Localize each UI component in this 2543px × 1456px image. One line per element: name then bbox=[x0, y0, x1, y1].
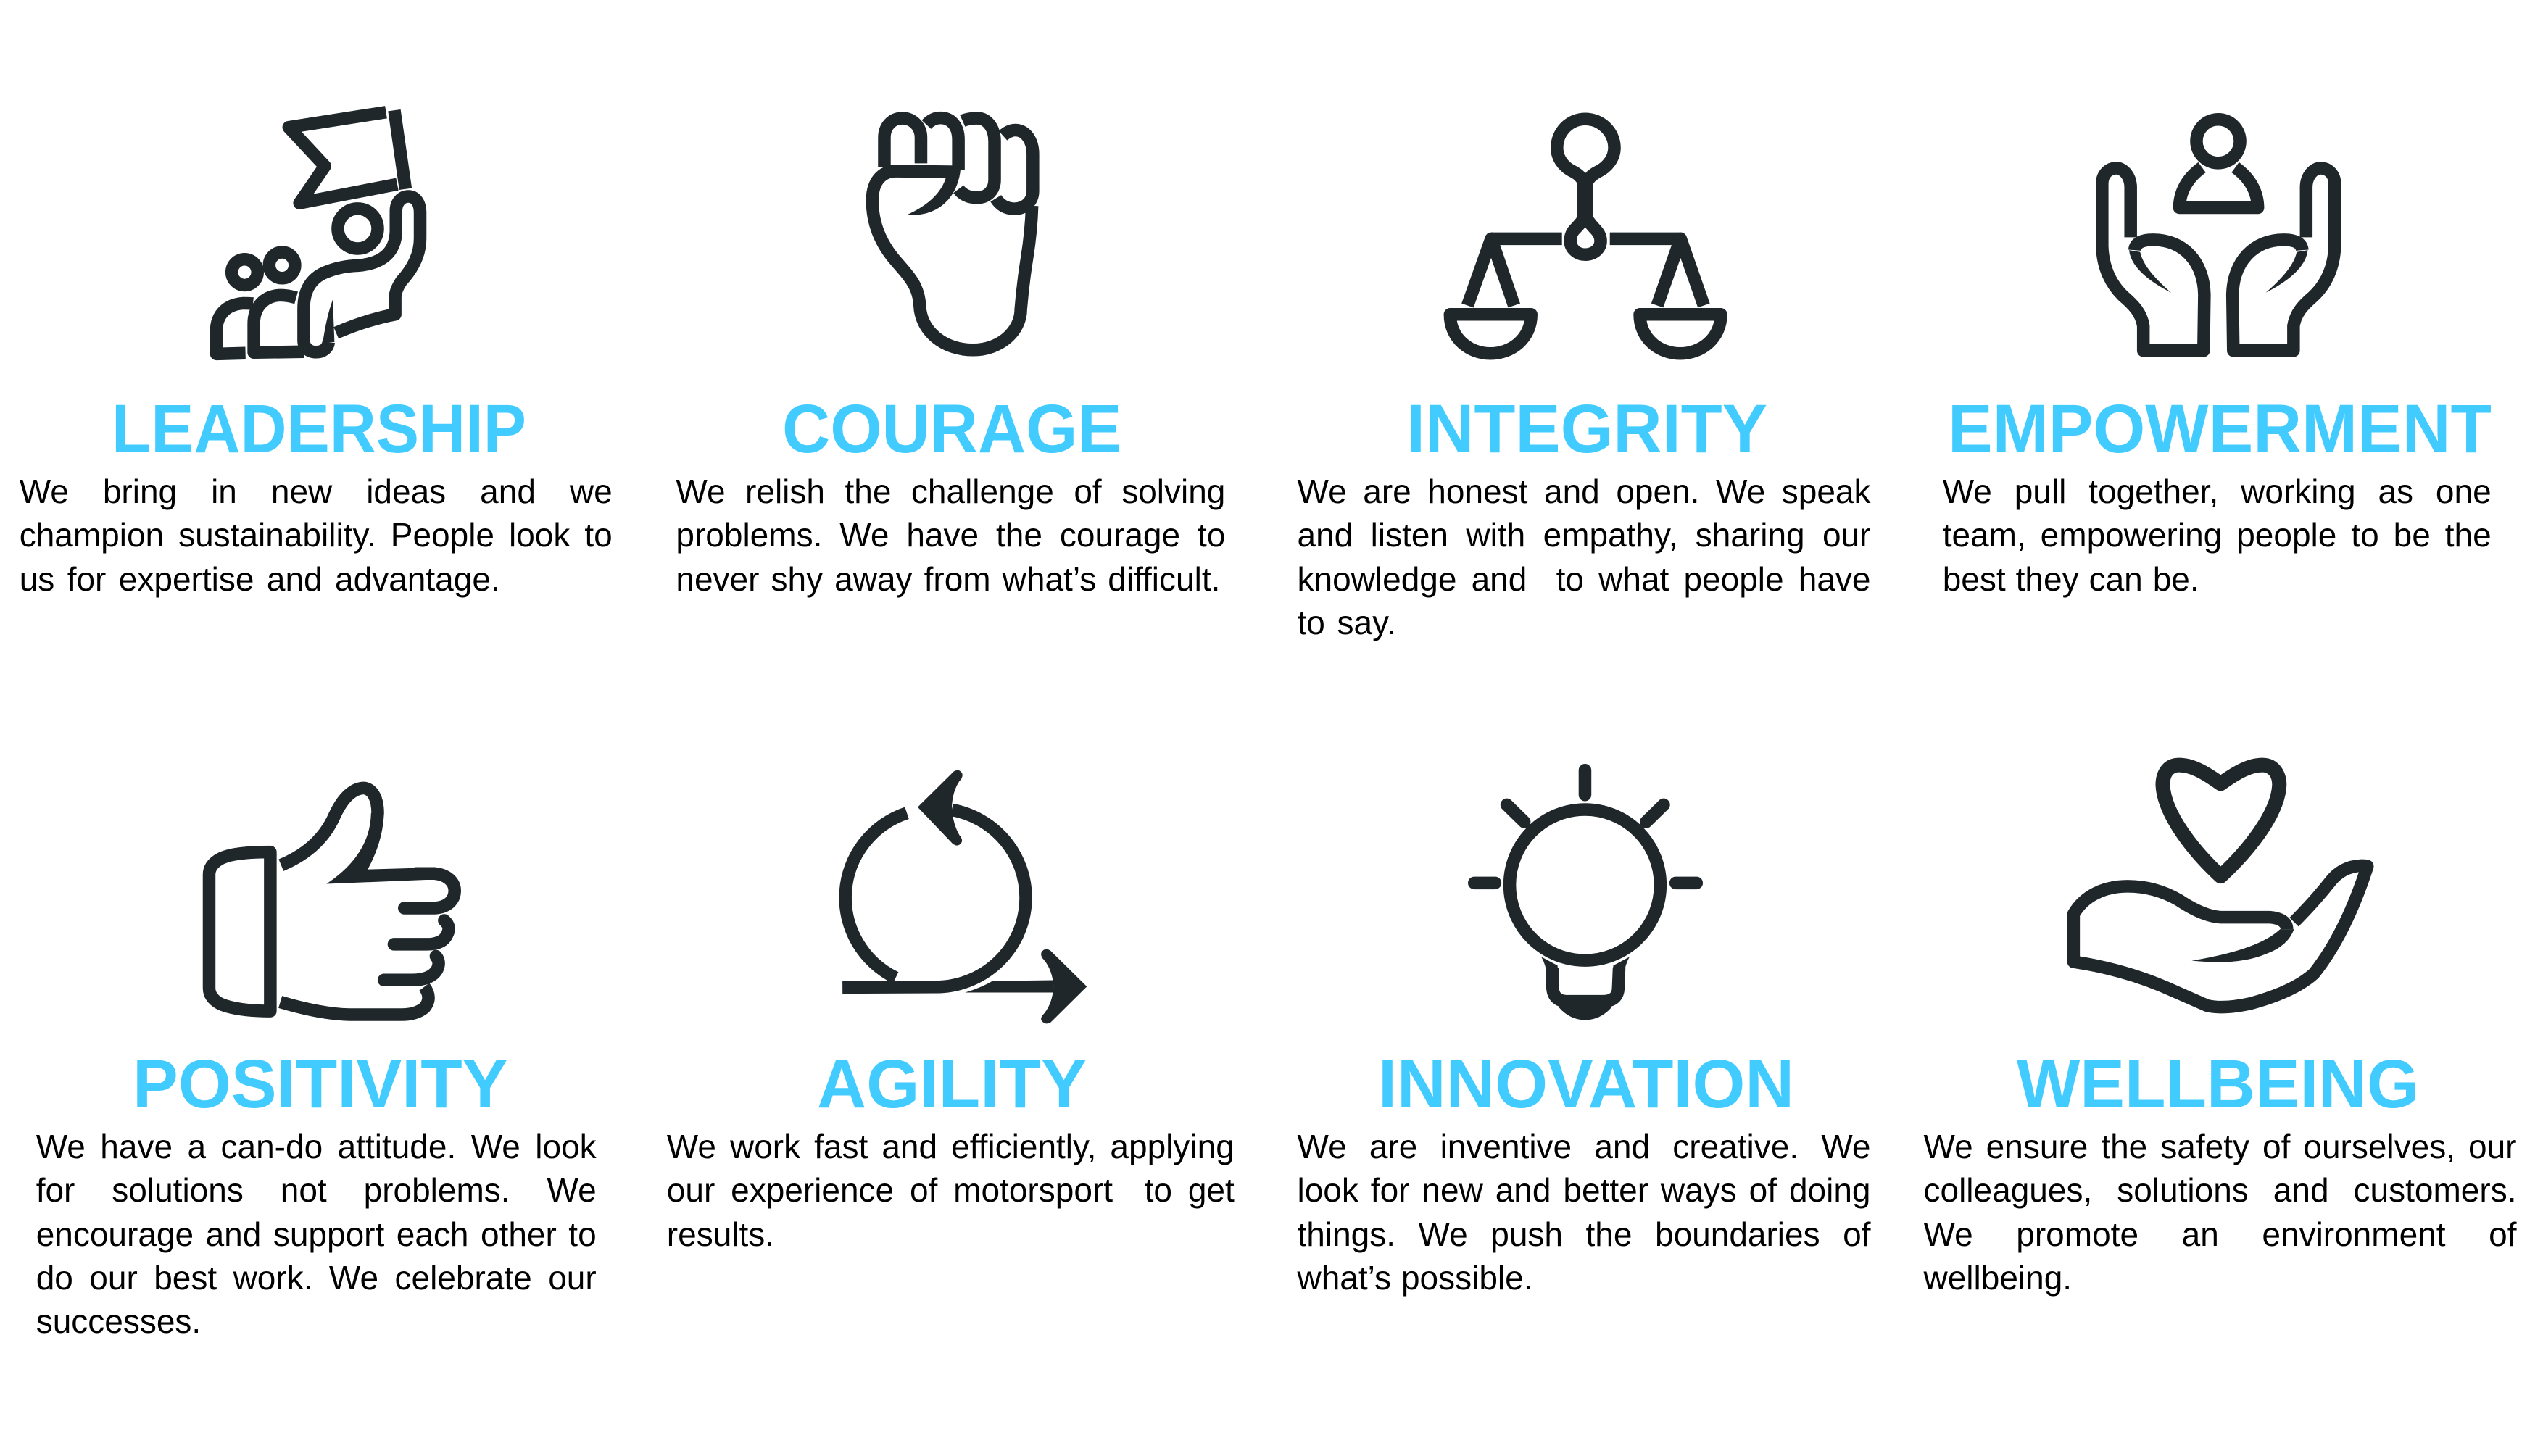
heading: positivity: POSITIVITY bbox=[132, 1046, 507, 1123]
panel: empowerment bbox=[1943, 113, 2492, 598]
heart bbox=[2162, 765, 2279, 876]
text: wellbeing description: wellbeing. bbox=[1924, 1259, 2072, 1297]
text: innovation description: We are inventive and creative. We bbox=[1298, 1128, 1870, 1165]
flag bbox=[289, 111, 405, 204]
fingers bbox=[281, 873, 455, 1015]
open hand bbox=[2073, 865, 2367, 1007]
icon: hand holding heart bbox=[2067, 758, 2373, 1013]
thumb bbox=[281, 788, 435, 883]
icon: loop arrow bbox=[839, 770, 1087, 1023]
heading: innovation: INNOVATION bbox=[1378, 1046, 1794, 1123]
text: innovation description bbox=[1298, 1128, 1871, 1297]
text: innovation description: what’s possible. bbox=[1298, 1259, 1532, 1297]
text: wellbeing description: colleagues, solutions and customers. bbox=[1924, 1171, 2517, 1209]
text: wellbeing description: We ensure the safety of ourselves, our bbox=[1924, 1128, 2517, 1165]
text: leadership description: us for expertise and advantage. bbox=[20, 560, 500, 598]
icon: raised fist bbox=[866, 112, 1040, 357]
icon: light bulb bbox=[1468, 764, 1704, 1020]
icon: thumbs up bbox=[203, 781, 461, 1021]
heading: wellbeing: WELLBEING bbox=[2017, 1046, 2419, 1123]
left hand bbox=[2102, 167, 2204, 350]
heading: leadership: LEADERSHIP bbox=[112, 391, 526, 467]
icon: hands raising a person bbox=[2096, 113, 2341, 357]
text: leadership description: We bring in new ideas and we bbox=[20, 473, 613, 510]
heading: empowerment: EMPOWERMENT bbox=[1948, 391, 2492, 467]
text: integrity description: We are honest and open. We speak bbox=[1298, 473, 1870, 510]
fingers bbox=[884, 117, 1033, 209]
text: courage description: never shy away from what’s difficult. bbox=[676, 560, 1220, 598]
heading: courage: COURAGE bbox=[781, 391, 1121, 467]
panel: positivity bbox=[36, 781, 597, 1340]
panel: courage bbox=[676, 112, 1225, 598]
text: empowerment description: team, empowering people to be the bbox=[1943, 516, 2492, 554]
text: wellbeing description bbox=[1924, 1128, 2517, 1297]
bulb glass bbox=[1510, 810, 1660, 960]
circular arrow bbox=[842, 770, 1026, 987]
panel: leadership bbox=[20, 106, 613, 598]
text: agility description: We work fast and efficiently, applying bbox=[667, 1128, 1235, 1165]
panel: innovation bbox=[1298, 764, 1871, 1297]
palm and thumb bbox=[872, 165, 1032, 349]
text: courage description: problems. We have the courage to bbox=[676, 516, 1225, 554]
text: positivity description bbox=[36, 1128, 597, 1340]
right hand bbox=[2232, 167, 2334, 350]
text: positivity description: encourage and support each other to bbox=[36, 1215, 597, 1253]
text: integrity description: and listen with empathy, sharing our bbox=[1298, 516, 1870, 554]
heading: agility: AGILITY bbox=[817, 1046, 1087, 1123]
text: integrity description: to say. bbox=[1298, 604, 1396, 641]
text: integrity description bbox=[1298, 473, 1870, 641]
text: empowerment description bbox=[1943, 473, 2492, 598]
cuff bbox=[209, 852, 270, 1011]
panel: integrity bbox=[1298, 113, 1870, 641]
text: positivity description: for solutions not problems. We bbox=[36, 1171, 597, 1209]
forward arrow bbox=[965, 949, 1087, 1023]
text: positivity description: successes. bbox=[36, 1302, 201, 1340]
right beam and pan bbox=[1609, 238, 1720, 353]
icon: leader with flag and team bbox=[210, 106, 426, 361]
bulb base bbox=[1541, 957, 1630, 1020]
text: agility description: results. bbox=[667, 1215, 774, 1253]
text: empowerment description: best they can be. bbox=[1943, 560, 2199, 598]
text: innovation description: things. We push the boundaries of bbox=[1298, 1215, 1870, 1253]
text: positivity description: We have a can-do attitude. We look bbox=[36, 1128, 597, 1165]
text: courage description bbox=[676, 473, 1225, 598]
text: leadership description: champion sustainability. People look to bbox=[20, 516, 613, 554]
text: agility description: our experience of motorsport to get bbox=[667, 1171, 1235, 1209]
text: positivity description: do our best work. We celebrate our bbox=[36, 1259, 597, 1297]
leader figure bbox=[304, 196, 420, 352]
left beam and pan bbox=[1450, 238, 1561, 353]
text: courage description: We relish the challenge of solving bbox=[676, 473, 1225, 510]
icon: balance scales bbox=[1444, 113, 1727, 359]
text: leadership description bbox=[20, 473, 613, 598]
person bbox=[2179, 119, 2257, 207]
text: integrity description: knowledge and to what people have bbox=[1298, 560, 1870, 598]
heading: integrity: INTEGRITY bbox=[1406, 391, 1767, 467]
light rays bbox=[1474, 770, 1696, 883]
text: agility description bbox=[667, 1128, 1235, 1253]
panel: agility bbox=[667, 770, 1235, 1253]
scale stem bbox=[1556, 119, 1614, 254]
text: innovation description: look for new and better ways of doing bbox=[1298, 1171, 1870, 1209]
team members bbox=[216, 252, 304, 354]
text: empowerment description: We pull together, working as one bbox=[1943, 473, 2492, 510]
panel: wellbeing bbox=[1924, 758, 2517, 1297]
text: wellbeing description: We promote an environment of bbox=[1924, 1215, 2517, 1253]
